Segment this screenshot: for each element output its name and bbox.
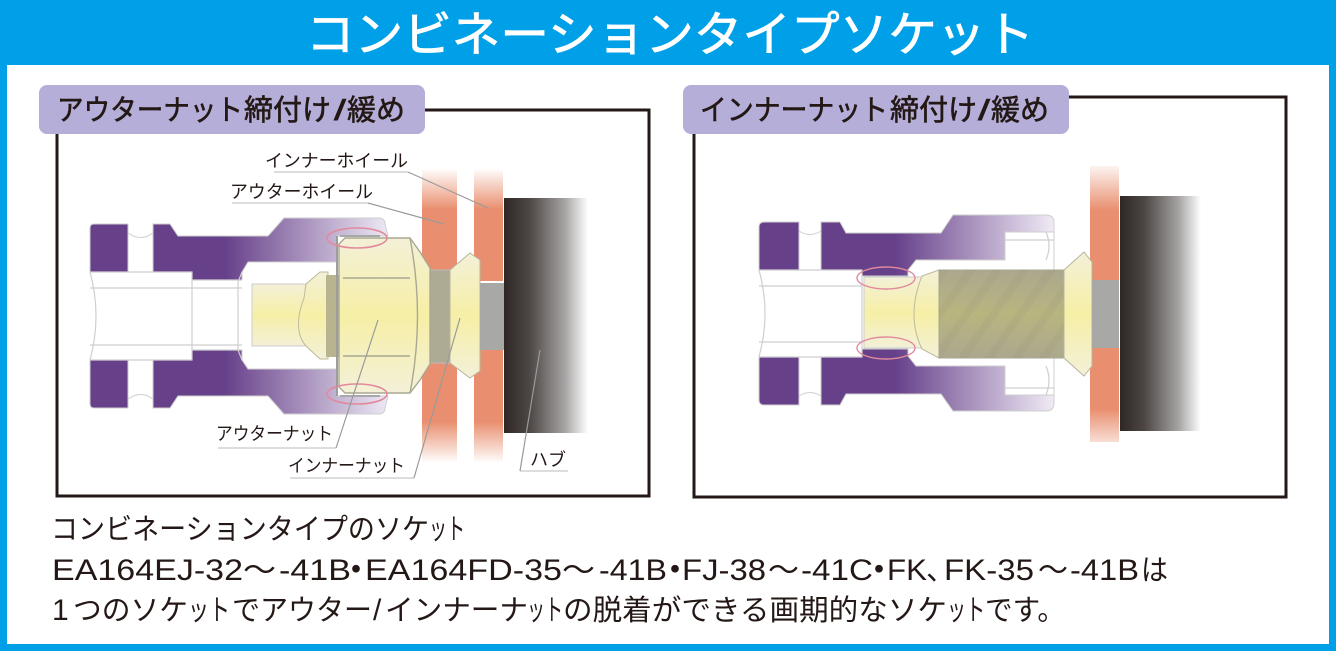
label: inner nut	[288, 318, 460, 478]
title: コンビネーションタイプソケット	[306, 9, 1034, 62]
description text: つのソケ	[73, 595, 188, 627]
description text: ～	[243, 555, 276, 587]
bolt	[252, 253, 504, 378]
description text: /	[373, 594, 382, 627]
heading tab: outer nut: 締付け	[244, 94, 331, 127]
label: outer wheel: アウターホイール	[230, 182, 373, 202]
description text: ット	[947, 595, 985, 627]
description text: ット	[188, 595, 230, 627]
socket	[90, 218, 388, 414]
heading tab: inner nut	[683, 85, 1069, 134]
label: inner wheel: インナーホイール	[265, 151, 408, 171]
heading tab: inner nut: /	[978, 95, 991, 127]
panel frame: outer nut	[57, 110, 649, 496]
description text: です。	[985, 595, 1065, 627]
description text: -41C	[801, 554, 873, 587]
description text: ット	[527, 595, 563, 627]
label: outer nut: アウターナット	[216, 424, 333, 444]
description text: コンビネーションタイプのソケ	[51, 514, 429, 546]
heading tab: inner nut: 締付け	[890, 94, 977, 127]
description text: EA164EJ-32	[52, 554, 243, 587]
description text: EA164FD-35	[365, 554, 562, 587]
heading tab: inner nut: 緩め	[991, 94, 1049, 127]
description text	[51, 514, 1168, 627]
description text: でアウター	[232, 595, 372, 627]
heading tab: outer nut: アウターナット	[57, 95, 243, 127]
description text: の脱着ができる画期的なソケ	[563, 594, 947, 627]
inner wheel	[474, 168, 503, 463]
hub	[504, 198, 588, 433]
outer wheel	[422, 168, 457, 463]
description text: FK	[887, 554, 927, 587]
description text: ・	[657, 549, 693, 590]
label: outer nut	[216, 320, 378, 448]
label: hub: ハブ	[530, 449, 566, 470]
description text: 1	[52, 594, 69, 627]
label: hub	[520, 350, 568, 471]
description text: FK-35	[944, 554, 1034, 587]
heading tab: outer nut	[39, 85, 425, 134]
outer nut	[337, 236, 430, 396]
panel: inner nut	[683, 85, 1286, 497]
description text: ～	[562, 555, 595, 587]
description text: 、	[926, 555, 955, 587]
heading tab: outer nut: 緩め	[347, 94, 405, 127]
description text: インナーナ	[385, 595, 528, 627]
panel: outer nut	[39, 85, 649, 496]
description text: -41B	[1070, 554, 1139, 587]
description text: -41B	[599, 554, 667, 587]
description text: -41B	[279, 554, 351, 587]
socket	[759, 215, 1054, 411]
description text: ～	[1038, 555, 1068, 587]
description text: ット	[429, 514, 465, 546]
red highlight ellipses	[857, 267, 915, 359]
hub	[1120, 196, 1201, 431]
label: outer wheel	[230, 182, 444, 224]
heading tab: inner nut: インナーナット	[700, 95, 888, 127]
label: inner wheel	[265, 151, 488, 208]
red highlight ellipses	[327, 228, 387, 404]
bolt	[864, 252, 1119, 376]
description text: は	[1141, 555, 1168, 587]
description text: ・	[861, 549, 897, 590]
description text: ～	[768, 555, 799, 587]
heading tab: outer nut: /	[334, 95, 347, 127]
description text: ・	[338, 549, 374, 590]
description text: FJ-38	[682, 554, 766, 587]
label: inner nut: インナーナット	[288, 456, 405, 476]
wheel	[1090, 166, 1119, 442]
panel frame: inner nut	[694, 97, 1286, 497]
